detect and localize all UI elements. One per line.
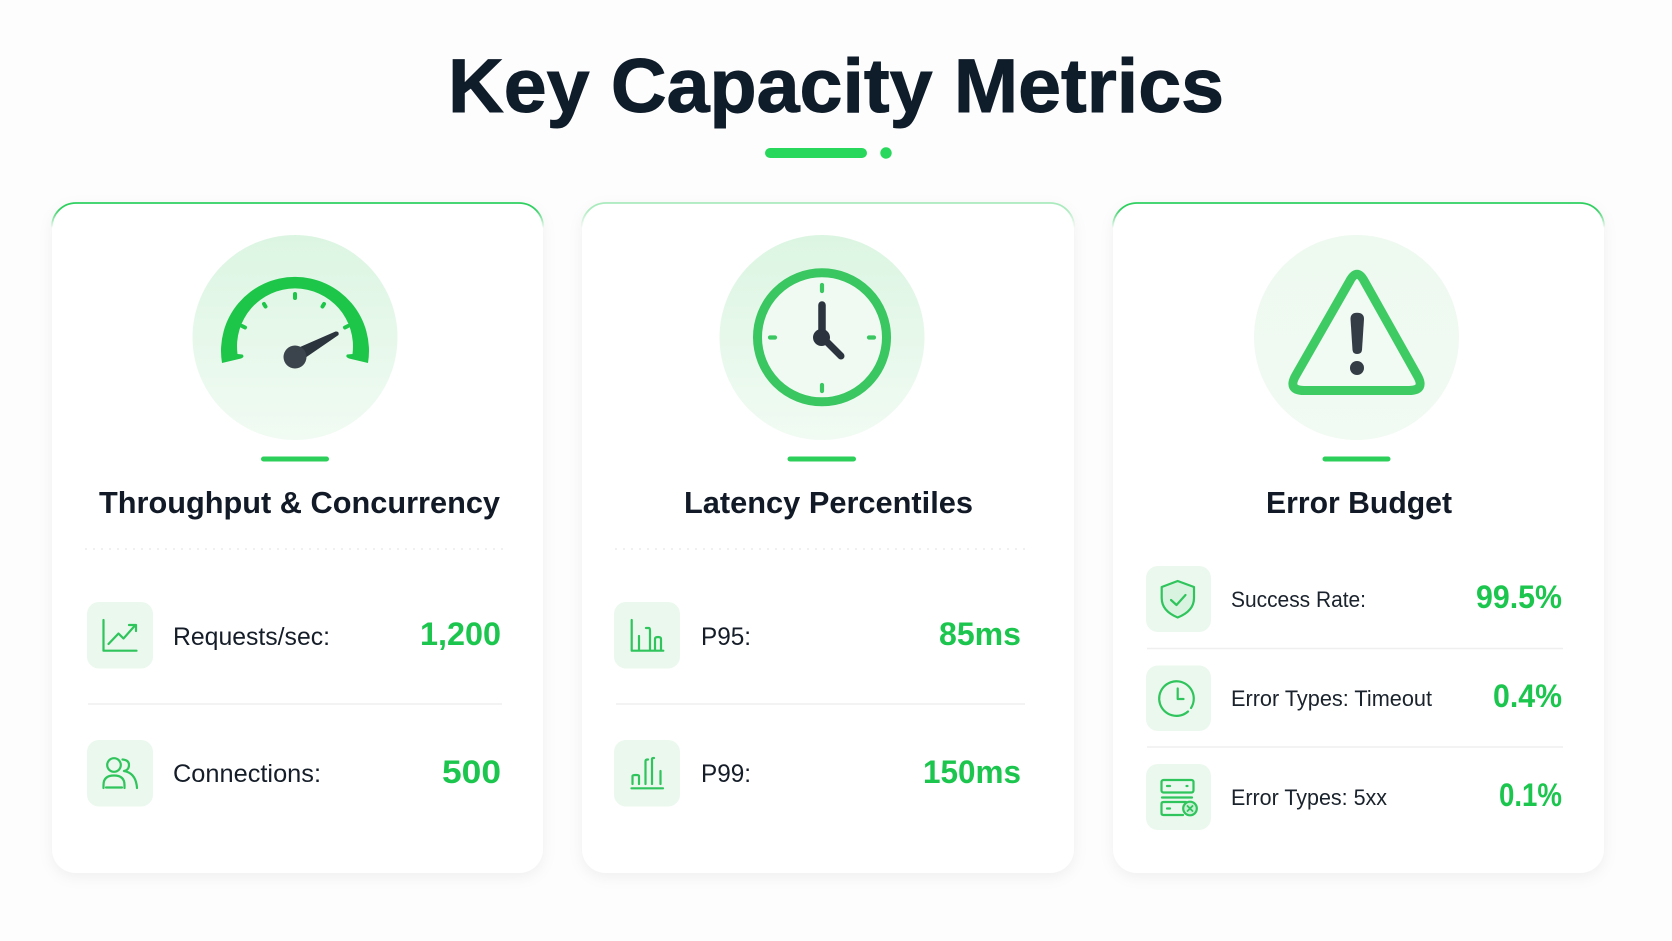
row: connections: Connections: [173, 760, 321, 788]
row: P95 [614, 602, 1021, 668]
title: Key Capacity Metrics [448, 44, 1224, 129]
row: success rate: Success Rate: [1231, 587, 1366, 612]
icon: server error [1162, 780, 1197, 815]
heading: Throughput & Concurrency [99, 485, 501, 520]
row: requests per second [87, 602, 501, 668]
icon: trend chart [104, 620, 136, 651]
panel: throughput and concurrency [52, 203, 543, 873]
row: 5xx errors: 0.1% [1499, 777, 1562, 813]
row: 5xx errors [1146, 764, 1562, 830]
row: connections: 500 [442, 754, 501, 790]
row: P99 [614, 740, 1021, 806]
row: requests per second: Requests/sec: [173, 623, 330, 651]
heading: Latency Percentiles [684, 485, 973, 520]
accent bar [1322, 456, 1390, 462]
row: success rate: 99.5% [1476, 579, 1562, 615]
row: timeout errors: 0.4% [1493, 678, 1562, 714]
title accent bar and dot [765, 147, 892, 159]
accent bar [261, 456, 329, 462]
icon: timeout clock [1159, 681, 1194, 716]
row: requests per second: 1,200 [420, 616, 501, 652]
panel: latency percentiles [582, 203, 1074, 873]
icon: warning triangle [1254, 235, 1459, 440]
icon: bar chart P99 [632, 758, 663, 788]
icon: clock [720, 235, 924, 440]
panel: error budget [1113, 203, 1604, 873]
icon: bar chart P95 [632, 620, 663, 651]
row: timeout errors [1146, 666, 1562, 731]
heading: Error Budget [1266, 485, 1452, 520]
row: connections [87, 740, 501, 806]
icon: shield check [1162, 581, 1194, 618]
row: 5xx errors: Error Types: 5xx [1231, 785, 1387, 810]
icon: users [104, 758, 137, 788]
row: P95: 85ms [939, 616, 1021, 652]
icon: speedometer gauge [192, 235, 398, 440]
row: timeout errors: Error Types: Timeout [1231, 686, 1432, 711]
row: P95: P95: [701, 623, 751, 651]
row: success rate [1146, 566, 1562, 632]
row: P99: P99: [701, 760, 751, 788]
row: P99: 150ms [923, 754, 1021, 790]
accent bar [788, 456, 856, 462]
